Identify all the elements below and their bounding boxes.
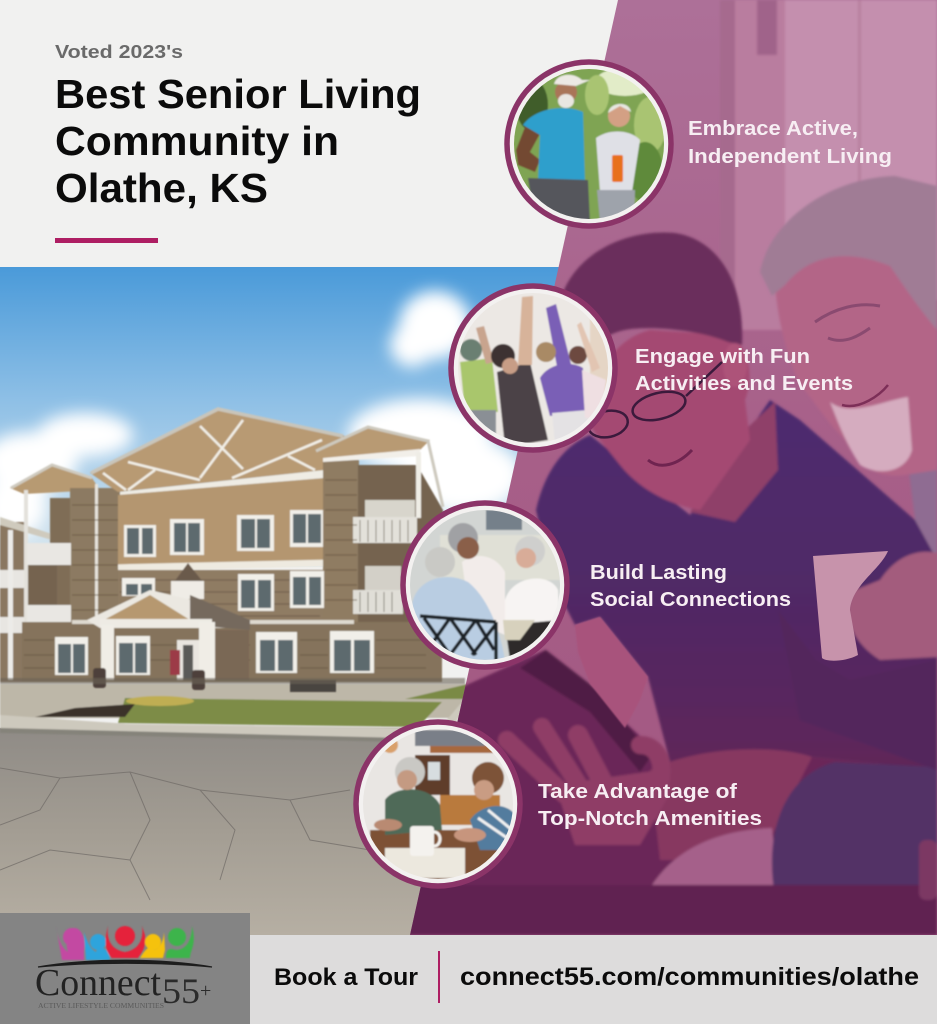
label: engage with fun: Engage with Fun <box>635 346 810 368</box>
bottle <box>612 155 623 182</box>
palm <box>560 770 656 846</box>
wordmark number: 55 <box>162 971 200 1011</box>
left woman <box>385 789 442 835</box>
two men photo <box>400 176 937 935</box>
photo: apartment building <box>0 267 600 935</box>
panel: purple photo overlay <box>400 0 937 935</box>
table <box>400 885 937 935</box>
clouds <box>0 291 522 537</box>
ring <box>356 722 520 886</box>
planters <box>93 668 106 688</box>
building <box>0 408 465 692</box>
lattice chair <box>420 616 496 660</box>
glasses <box>586 362 722 441</box>
logo figures <box>56 926 194 960</box>
left wing gable <box>10 465 100 494</box>
patio furniture <box>290 680 336 692</box>
circle photo: amenities <box>355 720 525 890</box>
bay windows upper <box>55 510 374 675</box>
table <box>370 830 510 880</box>
green woman <box>460 358 498 412</box>
swoosh <box>38 960 212 967</box>
purple woman <box>540 364 585 416</box>
label: take advantage: Top-Notch Amenities <box>538 808 762 830</box>
lower dark zone <box>458 650 872 886</box>
heading line 2: Community in <box>55 118 339 164</box>
label: engage with fun: Activities and Events <box>635 373 853 395</box>
accent rule <box>55 238 158 243</box>
central stone <box>118 570 324 630</box>
pavement cracks <box>0 768 370 900</box>
road <box>0 728 560 935</box>
stone texture <box>24 480 426 668</box>
wordmark plus: + <box>200 980 211 1002</box>
central gable <box>90 408 345 492</box>
man arms <box>516 126 540 172</box>
central siding <box>118 478 325 570</box>
older man hair <box>760 176 937 330</box>
older man brow and eye <box>815 305 880 340</box>
class photo <box>450 285 620 455</box>
tablet <box>520 650 652 772</box>
fingers <box>507 727 661 805</box>
website url: connect55.com/communities/olathe <box>460 963 919 991</box>
label: embrace active: Embrace Active, <box>688 118 858 140</box>
young man neck <box>690 402 778 522</box>
heading line 1: Best Senior Living <box>55 71 421 117</box>
forearm <box>650 749 812 860</box>
older man smile <box>842 385 888 406</box>
wordmark: Connect <box>35 962 161 1004</box>
man back <box>412 577 505 660</box>
woman top <box>596 131 640 192</box>
tagline: ACTIVE LIFESTYLE COMMUNITIES <box>38 1002 164 1010</box>
joggers photo <box>514 69 664 219</box>
eyebrow: voted: Voted 2023's <box>55 42 183 62</box>
ring <box>451 286 615 450</box>
wall background <box>400 0 937 935</box>
dark shirt woman <box>497 362 548 447</box>
logo: Connect55+ <box>0 913 250 1024</box>
label: take advantage: Take Advantage of <box>538 781 737 803</box>
book a tour: Book a Tour <box>274 964 418 991</box>
woman pants <box>597 190 635 222</box>
standing woman <box>462 556 505 635</box>
older man face <box>775 247 937 476</box>
heading line 3: Olathe, KS <box>55 165 268 211</box>
young man face <box>590 330 750 510</box>
label: build lasting <box>590 562 791 611</box>
left balconies <box>27 543 71 565</box>
white shirt woman <box>582 370 606 418</box>
divider <box>438 951 440 1003</box>
wall details <box>720 0 937 330</box>
label: embrace active: Independent Living <box>688 146 892 168</box>
crafts photo <box>355 720 525 890</box>
right woman <box>505 579 560 630</box>
pants <box>772 762 937 890</box>
knee <box>652 828 778 885</box>
left wing stone <box>50 498 120 680</box>
right wing <box>358 465 443 680</box>
sky <box>0 267 600 567</box>
left stone tower <box>70 488 120 628</box>
circle photo: active couple jogging <box>507 62 671 226</box>
shirt <box>536 400 937 770</box>
title block <box>55 42 421 243</box>
label: engage with fun <box>635 346 853 395</box>
ear <box>724 342 746 386</box>
pink gap <box>575 617 648 728</box>
ring <box>507 62 671 226</box>
young man hair <box>563 231 744 346</box>
sidewalk and curb <box>0 684 470 743</box>
ground floor stone <box>22 622 442 682</box>
smile <box>648 450 692 465</box>
circle photo: social connections <box>400 500 570 670</box>
far left wing <box>0 522 26 682</box>
seniors photo <box>400 500 570 670</box>
mug <box>813 551 888 661</box>
mug hand <box>849 552 937 660</box>
header background <box>0 0 937 267</box>
label: build lasting: Build Lasting <box>590 562 727 584</box>
man pants <box>528 178 590 222</box>
older man beard <box>830 397 912 471</box>
right tower <box>323 460 359 625</box>
dormer <box>174 563 203 582</box>
label: build lasting: Social Connections <box>590 589 791 611</box>
footer call-to-action bar <box>250 935 937 1024</box>
mug <box>410 826 434 856</box>
older man collar <box>909 470 937 553</box>
man head <box>554 84 578 100</box>
label: take advantage <box>538 781 762 830</box>
entrance porch <box>87 590 250 628</box>
mug hand sleeve <box>802 716 936 766</box>
label: embrace active <box>688 118 892 168</box>
right woman <box>470 806 515 850</box>
ring <box>403 503 567 667</box>
man shirt <box>523 108 585 182</box>
woman head <box>608 105 630 127</box>
circle photo: exercise class <box>450 285 620 455</box>
